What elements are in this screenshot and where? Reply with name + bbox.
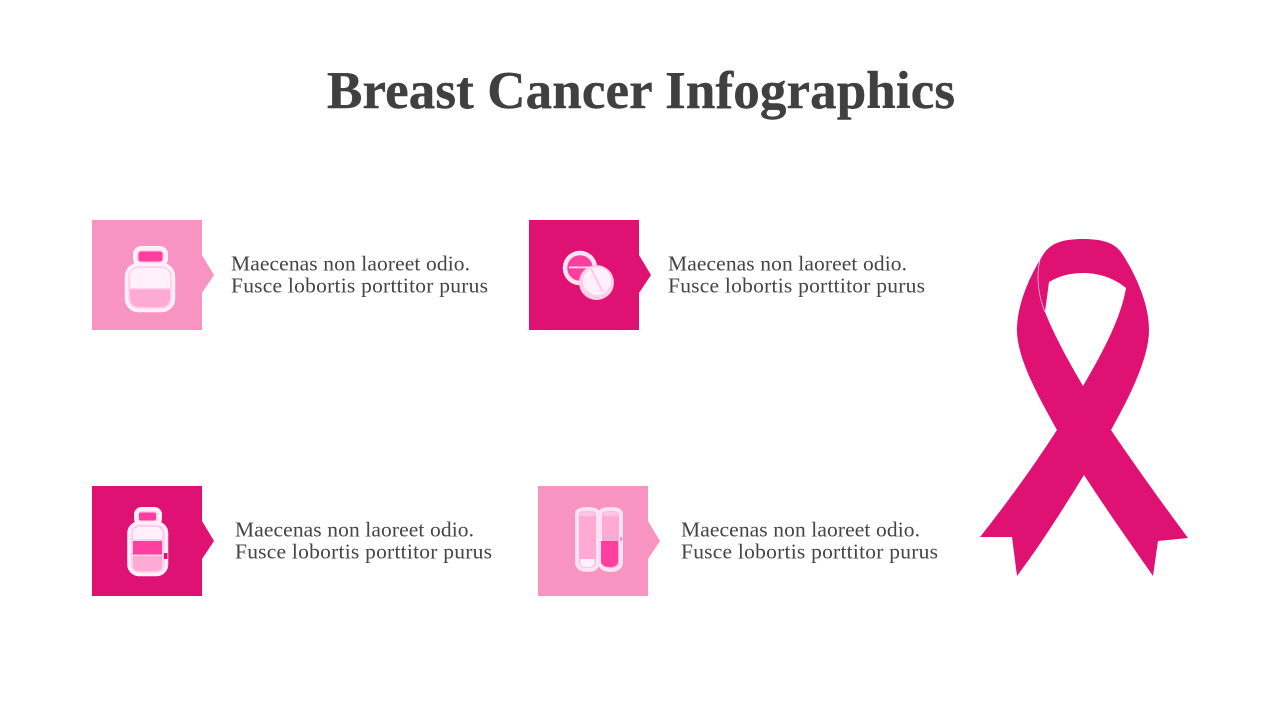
icon tile 3 with arrow xyxy=(92,486,214,596)
text: item 1: Fusce lobortis porttitor purus xyxy=(231,274,488,298)
icon tile 4 with arrow xyxy=(538,486,660,596)
text: item 4: Fusce lobortis porttitor purus xyxy=(681,540,938,564)
icon: awareness ribbon xyxy=(980,239,1188,576)
panel: item 3 xyxy=(92,486,492,596)
text: item 4: Maecenas non laoreet odio. xyxy=(681,518,920,542)
text: item 3: Fusce lobortis porttitor purus xyxy=(235,540,492,564)
icon tile 2 with arrow xyxy=(529,220,651,330)
text: item 3 xyxy=(235,518,492,564)
panel: item 1 xyxy=(92,220,488,330)
text: item 3: Maecenas non laoreet odio. xyxy=(235,518,474,542)
text: item 2: Fusce lobortis porttitor purus xyxy=(668,274,925,298)
title: Breast Cancer Infographics xyxy=(327,62,955,120)
icon: medicine jar xyxy=(126,248,174,310)
text: item 1 xyxy=(231,252,488,298)
text: item 4 xyxy=(681,518,938,564)
icon: pills xyxy=(565,253,614,300)
panel: item 4 xyxy=(538,486,938,596)
text: item 2 xyxy=(668,252,925,298)
text: item 1: Maecenas non laoreet odio. xyxy=(231,252,470,276)
panel: item 2 xyxy=(529,220,925,330)
text: item 2: Maecenas non laoreet odio. xyxy=(668,252,907,276)
icon tile 1 with arrow xyxy=(92,220,214,330)
icon: medicine bottle xyxy=(129,509,168,574)
icon: test tubes xyxy=(577,509,623,570)
